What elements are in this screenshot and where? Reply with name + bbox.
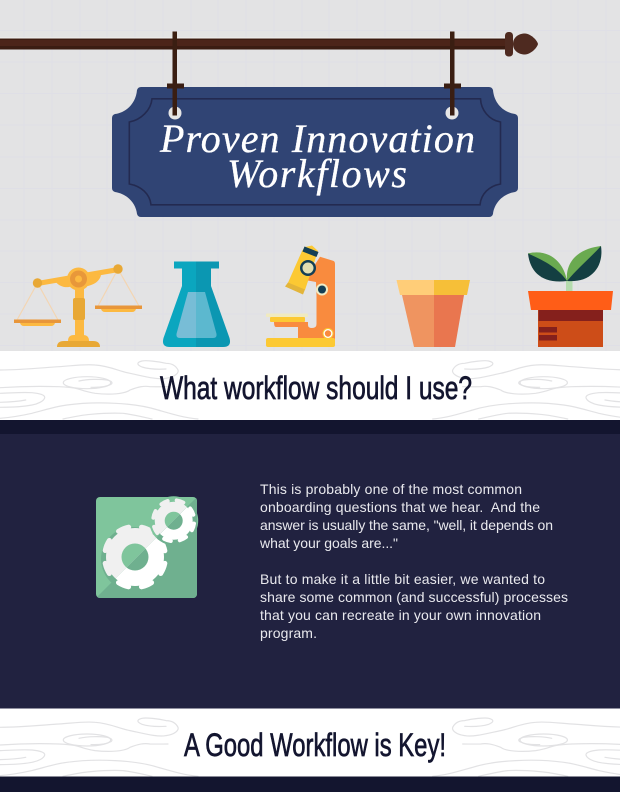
curtain rod: [0, 32, 538, 56]
intro text: onboarding questions that we hear. And the: [260, 499, 540, 515]
intro text: This is probably one of the most common: [260, 481, 522, 497]
icon: balance scale: [14, 264, 142, 347]
banner heading: What workflow should I use?: [160, 370, 472, 406]
icon: potted plant: [528, 246, 613, 347]
banner: a good workflow is key: [0, 708, 620, 776]
hanging sign: [112, 87, 518, 217]
background: grid wall: [0, 0, 620, 351]
intro text: [259, 481, 568, 641]
intro text: But to make it a little bit easier, we wanted to: [260, 571, 545, 587]
sign title: Workflows: [227, 151, 407, 196]
sign title: Proven Innovation: [159, 116, 475, 161]
intro text: program.: [260, 625, 317, 641]
shaded half of gears: [96, 496, 198, 598]
sign title: [159, 116, 475, 196]
icon: microscope: [266, 246, 335, 347]
footer strip: [0, 776, 620, 792]
banner: what workflow should I use: [0, 351, 620, 420]
icon: erlenmeyer flask: [163, 262, 230, 347]
icon: gears on green square: [96, 496, 198, 598]
hanging straps: [167, 32, 461, 116]
icon: empty flower pot: [396, 280, 470, 347]
intro text: what your goals are...": [259, 535, 398, 551]
intro text: that you can recreate in your own innovation: [260, 607, 541, 623]
banner heading: A Good Workflow is Key!: [184, 727, 446, 763]
dark section background: [0, 420, 620, 708]
intro text: answer is usually the same, "well, it depends on: [260, 517, 553, 533]
intro text: share some common (and successful) processes: [260, 589, 568, 605]
light half of gears: [99, 496, 198, 593]
